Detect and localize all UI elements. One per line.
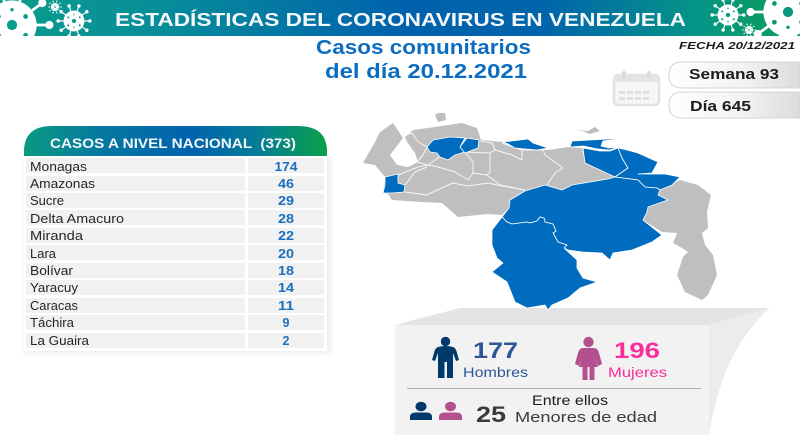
table header: CASOS A NIVEL NACIONAL (373) <box>50 135 296 151</box>
date label: FECHA 20/12/2021 <box>679 40 795 52</box>
women count: 196 <box>614 338 660 363</box>
icon: girl <box>439 402 462 420</box>
state: Delta Amacuro <box>615 148 680 190</box>
minors text: Menores de edad <box>515 409 657 426</box>
state: Monagas <box>583 148 628 177</box>
state: Táchira <box>383 174 405 193</box>
case counts: 20 <box>278 247 294 261</box>
icons: left viruses <box>0 0 92 36</box>
subtitle: del día 20.12.2021 <box>325 61 527 83</box>
men count <box>463 338 528 380</box>
icon: calendar <box>614 71 659 105</box>
state names: Táchira <box>30 315 75 330</box>
state: Miranda <box>503 139 548 150</box>
case counts: 11 <box>278 299 294 313</box>
case counts: 9 <box>283 316 290 330</box>
state: Bolívar <box>502 177 668 260</box>
state names: Sucre <box>30 193 64 208</box>
state: Lara <box>427 137 465 160</box>
state names: Miranda <box>30 228 84 243</box>
map: blue states <box>383 137 680 310</box>
women count: Mujeres <box>608 365 667 380</box>
subtitle <box>316 37 531 83</box>
case counts: 22 <box>278 229 294 243</box>
men count: 177 <box>473 338 518 363</box>
icon: boy <box>410 402 432 420</box>
case counts: 2 <box>283 334 290 348</box>
state names: Amazonas <box>30 176 95 191</box>
case counts: 46 <box>278 177 294 191</box>
icons: right viruses <box>710 0 800 36</box>
subtitle: Casos comunitarios <box>316 37 531 59</box>
case counts: 29 <box>278 194 294 208</box>
panel: gender summary <box>395 308 770 435</box>
table header <box>24 126 327 156</box>
day pill: Día 645 <box>690 99 751 115</box>
state names: Caracas <box>30 298 78 313</box>
case counts: 14 <box>278 281 294 295</box>
case counts <box>274 160 298 348</box>
minors text: Entre ellos <box>532 393 608 408</box>
icon: woman <box>575 337 602 380</box>
icon: man <box>432 337 459 378</box>
state: Yaracuy <box>460 138 479 153</box>
panel: national cases table <box>24 126 330 353</box>
row backgrounds <box>26 158 324 348</box>
header band <box>0 0 800 36</box>
week pill: Semana 93 <box>689 67 779 83</box>
case counts: 174 <box>274 160 298 174</box>
men count: Hombres <box>463 365 528 380</box>
state names <box>30 159 124 348</box>
week pill <box>669 62 800 88</box>
state names: Monagas <box>30 159 87 174</box>
map of Venezuela <box>363 113 717 310</box>
state: Amazonas <box>492 217 597 310</box>
title: ESTADÍSTICAS DEL CORONAVIRUS EN VENEZUELA <box>115 9 686 30</box>
state: Sucre <box>570 138 627 150</box>
day pill <box>669 92 800 118</box>
minors text <box>476 393 657 427</box>
women count <box>608 338 667 380</box>
state names: Bolívar <box>30 263 74 278</box>
case counts: 18 <box>278 264 294 278</box>
state names: Yaracuy <box>30 280 79 295</box>
case counts: 28 <box>278 212 294 226</box>
state names: Delta Amacuro <box>30 211 124 226</box>
state names: Lara <box>30 246 57 261</box>
state names: La Guaira <box>30 333 90 348</box>
map: state borders <box>398 133 563 195</box>
minors text: 25 <box>476 402 506 427</box>
map: gray states <box>363 113 717 300</box>
